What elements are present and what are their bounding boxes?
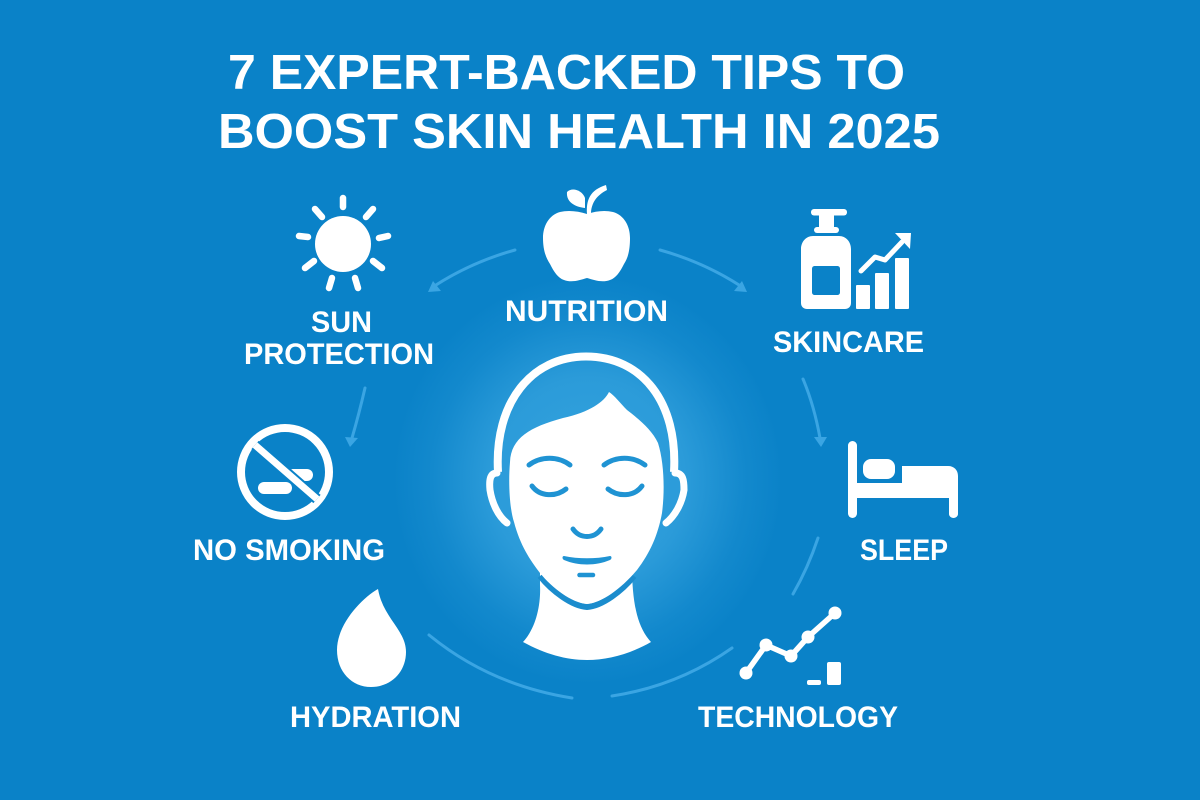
label: skincare: SKINCARE [773,326,924,359]
headband [498,356,674,472]
title [218,46,940,159]
label: sleep: SLEEP [860,534,948,567]
title: BOOST SKIN HEALTH IN 2025 [218,105,940,159]
left ear [490,473,507,523]
label: technology: TECHNOLOGY [698,701,898,734]
right ear [666,473,684,523]
label: sun protection [244,306,434,371]
icon: skincare bottle with growth chart [801,209,911,309]
icon: bed [848,441,958,518]
face illustration [490,356,684,660]
label: sun protection: SUN [311,306,372,339]
face shape [509,392,664,604]
title: 7 EXPERT-BACKED TIPS TO [228,46,905,100]
icon: apple [543,185,630,281]
icon: water drop [337,589,406,687]
icon: technology chart [740,606,842,685]
facial features [529,458,645,575]
label: sun protection: PROTECTION [244,338,434,371]
label: nutrition: NUTRITION [505,295,668,328]
label: no smoking: NO SMOKING [193,534,385,567]
chin line [540,576,634,607]
cycle arrows [345,250,827,698]
icon: sun [299,198,388,288]
label: hydration: HYDRATION [290,701,461,734]
neck [523,565,651,660]
icon: no smoking [241,428,329,516]
